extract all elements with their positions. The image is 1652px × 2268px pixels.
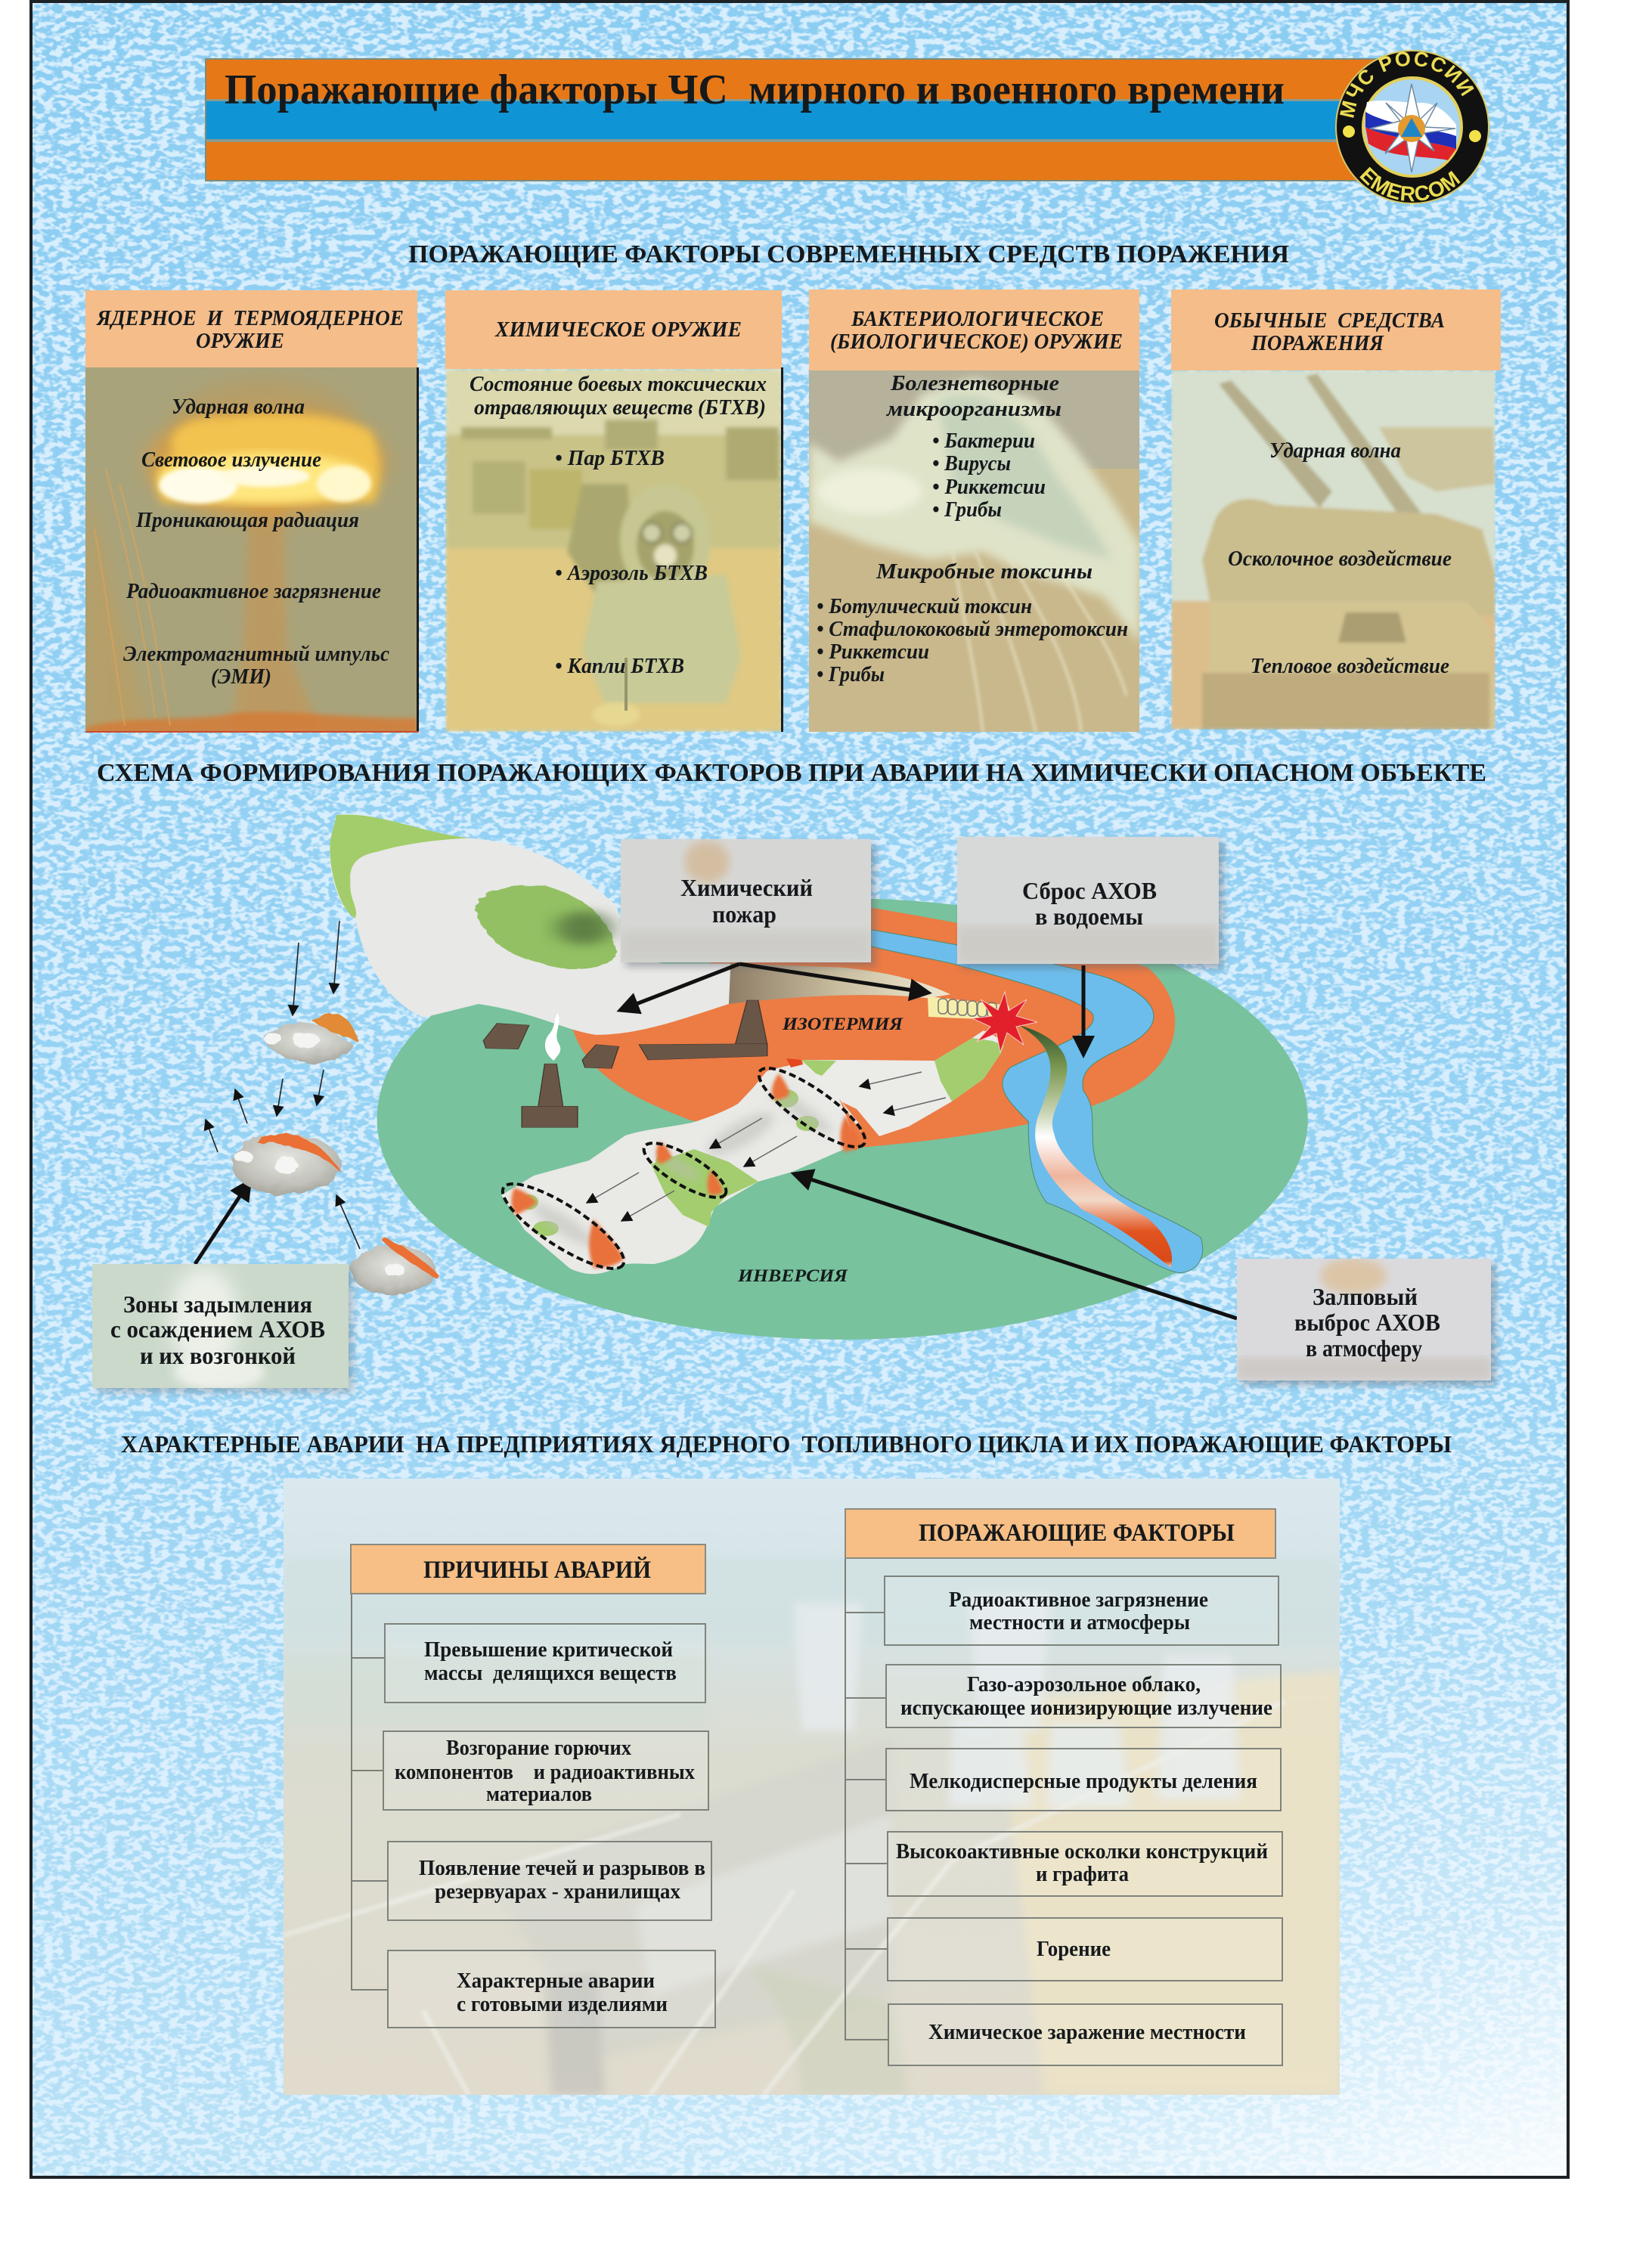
header (85, 290, 417, 367)
callout: smoke zones (92, 1264, 353, 1393)
right column: damaging factors: Химическое заражение местности (928, 2021, 1246, 2044)
image: soldier in gas mask (445, 369, 782, 732)
header: damaging factors (845, 1509, 1275, 1558)
panel: chemical weapons: ХИМИЧЕСКОЕ ОРУЖИЕ (494, 318, 742, 342)
icon: deposition cloud 3 (351, 1240, 439, 1295)
callout: volley release: Залповый (1313, 1283, 1418, 1310)
emblem: МЧС России (1335, 50, 1489, 204)
lower plume (501, 1061, 862, 1274)
panel: nuclear weapons: ЯДЕРНОЕ И ТЕРМОЯДЕРНОЕ (96, 306, 404, 330)
zone label: inversion: ИНВЕРСИЯ (737, 1266, 848, 1285)
right column: damaging factors: местности и атмосферы (969, 1611, 1190, 1634)
thick arrows (195, 964, 1237, 1318)
tan smoke from fire (729, 963, 950, 1004)
thin arrows to clouds (206, 921, 360, 1249)
emblem: МЧС России: EMERCOM (1359, 166, 1461, 201)
callout: volley release (1237, 1258, 1495, 1385)
chart: accident formation scheme (92, 814, 1495, 1393)
panel: biological weapons: • Риккетсии (932, 476, 1046, 499)
panel: nuclear weapons: Ударная волна (172, 395, 305, 419)
left column: causes: массы делящихся веществ (424, 1662, 677, 1685)
panel: conventional weapons: Ударная волна (1269, 439, 1401, 463)
smoke from chimney (545, 1013, 560, 1061)
callout: smoke zones: Зоны задымления (123, 1290, 312, 1318)
header (809, 290, 1139, 370)
right column: damaging factors: ПОРАЖАЮЩИЕ ФАКТОРЫ (919, 1520, 1235, 1547)
panel: biological weapons: БАКТЕРИОЛОГИЧЕСКОЕ (851, 307, 1104, 331)
right column: damaging factors: и графита (1036, 1863, 1129, 1886)
panel: biological weapons: Болезнетворные (890, 371, 1059, 395)
panel: conventional weapons: ПОРАЖЕНИЯ (1251, 331, 1384, 355)
zones: inversion, isotherm, river and upper plume (330, 814, 1308, 1340)
right column: damaging factors (845, 1509, 1282, 2065)
title banner (206, 59, 1378, 181)
callout: discharge into water: в водоемы (1035, 903, 1143, 930)
panel: biological weapons: • Грибы (817, 663, 885, 686)
upper smoke plume (330, 814, 745, 1035)
explosion (972, 992, 1037, 1052)
connector lines (845, 1558, 888, 2040)
image: nuclear mushroom (85, 367, 417, 733)
connector lines (352, 1594, 388, 1990)
panel: biological weapons: (БИОЛОГИЧЕСКОЕ) ОРУЖИЕ (830, 330, 1123, 354)
cause boxes (383, 1624, 715, 2028)
panel: biological weapons: • Стафилококовый энтеротоксин (817, 618, 1128, 641)
panel: chemical weapons: отравляющих веществ (БТХВ) (474, 396, 766, 420)
panel: biological weapons: • Вирусы (932, 452, 1011, 476)
image: bacteria spray (809, 370, 1139, 732)
panel: chemical weapons: • Капли БТХВ (555, 655, 684, 678)
panel: nuclear weapons: Световое излучение (141, 448, 321, 472)
left column: causes: компонентов и радиоактивных (395, 1761, 695, 1784)
left column: causes (351, 1545, 715, 2028)
right column: damaging factors: Горение (1037, 1938, 1111, 1961)
left column: causes: с готовыми изделиями (457, 1993, 668, 2016)
plant tanks (928, 996, 1013, 1021)
panel: biological weapons: • Бактерии (932, 429, 1035, 453)
image: anti-aircraft vehicle (1171, 370, 1495, 730)
left column: causes: Появление течей и разрывов в (419, 1857, 705, 1880)
panel: conventional weapons (1171, 290, 1501, 730)
callout: smoke zones: и их возгонкой (140, 1342, 296, 1369)
panel: nuclear weapons: Радиоактивное загрязнение (126, 580, 381, 603)
image: nuclear plant aerial (284, 1479, 1340, 2095)
heading: nuclear fuel cycle accidents: ХАРАКТЕРНЫЕ АВАРИИ НА ПРЕДПРИЯТИЯХ ЯДЕРНОГО ТОПЛИВНОГО ЦИКЛА И ИХ ПОРАЖАЮЩИЕ ФАКТОРЫ (121, 1430, 1452, 1458)
panel: biological weapons: микроорганизмы (886, 397, 1062, 421)
callout: smoke zones: с осаждением АХОВ (110, 1315, 325, 1343)
panel: chemical weapons: Состояние боевых токсических (470, 373, 767, 396)
callout: chemical fire: Химический (680, 874, 813, 901)
callout: volley release: в атмосферу (1306, 1334, 1422, 1362)
panel: nuclear weapons (85, 290, 419, 733)
pollutant in river (1019, 1025, 1172, 1268)
panel: chemical weapons (445, 290, 783, 732)
factor boxes (885, 1576, 1282, 2065)
left column: causes: Превышение критической (424, 1638, 673, 1662)
panel: biological weapons: • Грибы (932, 498, 1002, 522)
left column: causes: ПРИЧИНЫ АВАРИЙ (423, 1556, 651, 1584)
header (445, 290, 782, 369)
panel: conventional weapons: Тепловое воздействие (1251, 655, 1449, 678)
smoke shading (528, 1083, 837, 1252)
panel: nuclear weapons: Электромагнитный импульс (123, 643, 390, 666)
panel: conventional weapons: Осколочное воздействие (1228, 547, 1452, 571)
emblem: МЧС России: МЧС РОССИИ (1340, 51, 1474, 118)
header: causes (351, 1545, 705, 1594)
title text: Поражающие факторы ЧС мирного и военного времени (225, 67, 1285, 113)
left column: causes: Характерные аварии (457, 1969, 655, 1993)
panel: biological weapons: • Риккетсии (817, 640, 929, 664)
panel: chemical weapons: • Пар БТХВ (555, 447, 665, 470)
right column: damaging factors: Высокоактивные осколки конструкций (896, 1840, 1268, 1864)
panel: biological weapons (809, 290, 1139, 732)
ground contamination patches (520, 1038, 1004, 1236)
heading: modern weapons: ПОРАЖАЮЩИЕ ФАКТОРЫ СОВРЕМЕННЫХ СРЕДСТВ ПОРАЖЕНИЯ (408, 240, 1289, 268)
panel: chemical weapons: • Аэрозоль БТХВ (555, 562, 708, 585)
panel: conventional weapons: ОБЫЧНЫЕ СРЕДСТВА (1214, 308, 1445, 333)
right column: damaging factors: Газо-аэрозольное облако, (967, 1673, 1201, 1696)
factory buildings (483, 1000, 767, 1127)
callout: chemical fire (621, 839, 876, 967)
burn spots (511, 1074, 860, 1268)
right column: damaging factors: Радиоактивное загрязнение (949, 1588, 1208, 1612)
right column: damaging factors: испускающее ионизирующие излучение (900, 1696, 1272, 1720)
panel: nuclear weapons: Проникающая радиация (135, 509, 359, 532)
panel: nuclear plant accidents (284, 1479, 1340, 2095)
zone label: isotherm: ИЗОТЕРМИЯ (782, 1015, 903, 1033)
callout: discharge into water (957, 837, 1223, 968)
left column: causes: резервуарах - хранилищах (435, 1880, 680, 1904)
panel: biological weapons: Микробные токсины (876, 559, 1093, 584)
callout: chemical fire: пожар (712, 900, 776, 928)
heading: chemical accident scheme: СХЕМА ФОРМИРОВАНИЯ ПОРАЖАЮЩИХ ФАКТОРОВ ПРИ АВАРИИ НА ХИМИЧЕСКИ ОПАСНОМ ОБЪЕКТЕ (97, 759, 1486, 787)
dashed contour ellipses (492, 1056, 875, 1282)
left column: causes: Возгорание горючих (446, 1737, 631, 1760)
panel: nuclear weapons: (ЭМИ) (211, 665, 271, 689)
plume direction arrows (587, 1072, 946, 1221)
right column: damaging factors: Мелкодисперсные продукты деления (910, 1770, 1257, 1793)
header (1171, 290, 1501, 370)
callout: discharge into water: Сброс АХОВ (1022, 877, 1157, 904)
callout: volley release: выброс АХОВ (1294, 1309, 1440, 1336)
panel: biological weapons: • Ботулический токсин (817, 595, 1032, 618)
icon: deposition cloud 1 (262, 1014, 358, 1063)
icon: deposition cloud 2 (231, 1134, 342, 1194)
panel: nuclear weapons: ОРУЖИЕ (196, 329, 284, 353)
left column: causes: материалов (486, 1783, 592, 1806)
upper right plume segment (801, 1030, 1004, 1136)
